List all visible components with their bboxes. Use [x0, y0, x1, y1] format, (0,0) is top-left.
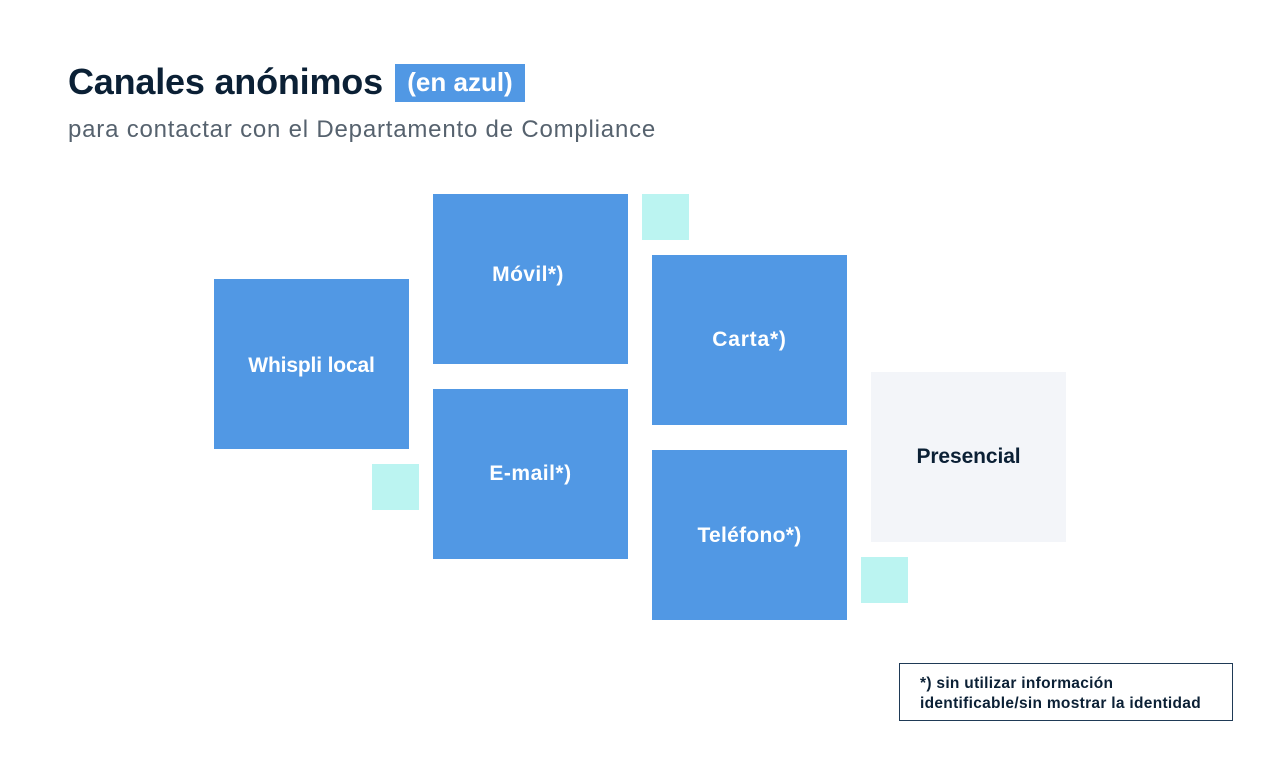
subtitle: para contactar con el Departamento de Compliance [68, 116, 656, 143]
channel: E-mail [433, 389, 628, 559]
footnote: *) sin utilizar información [920, 675, 1113, 692]
accent square: top [642, 194, 689, 240]
channel: Presencial [871, 372, 1066, 542]
channel: Teléfono [652, 450, 847, 620]
channel: Carta [652, 255, 847, 425]
channel: Carta: Carta*) [712, 328, 787, 351]
channel: Móvil [433, 194, 628, 364]
title: Canales anónimos [68, 61, 383, 102]
channel: Whispli local: Whispli local [248, 354, 375, 377]
accent square: left [372, 464, 419, 510]
footnote [899, 663, 1233, 721]
accent square: bottom right [861, 557, 908, 603]
channel: E-mail: E-mail*) [489, 462, 572, 485]
title highlight: en azul [395, 64, 525, 102]
title highlight: en azul: (en azul) [407, 67, 513, 97]
channel: Teléfono: Teléfono*) [697, 524, 802, 547]
channel: Whispli local [214, 279, 409, 449]
channel: Presencial: Presencial [916, 445, 1021, 468]
channel: Móvil: Móvil*) [492, 263, 564, 286]
footnote: identificable/sin mostrar la identidad [920, 695, 1201, 712]
